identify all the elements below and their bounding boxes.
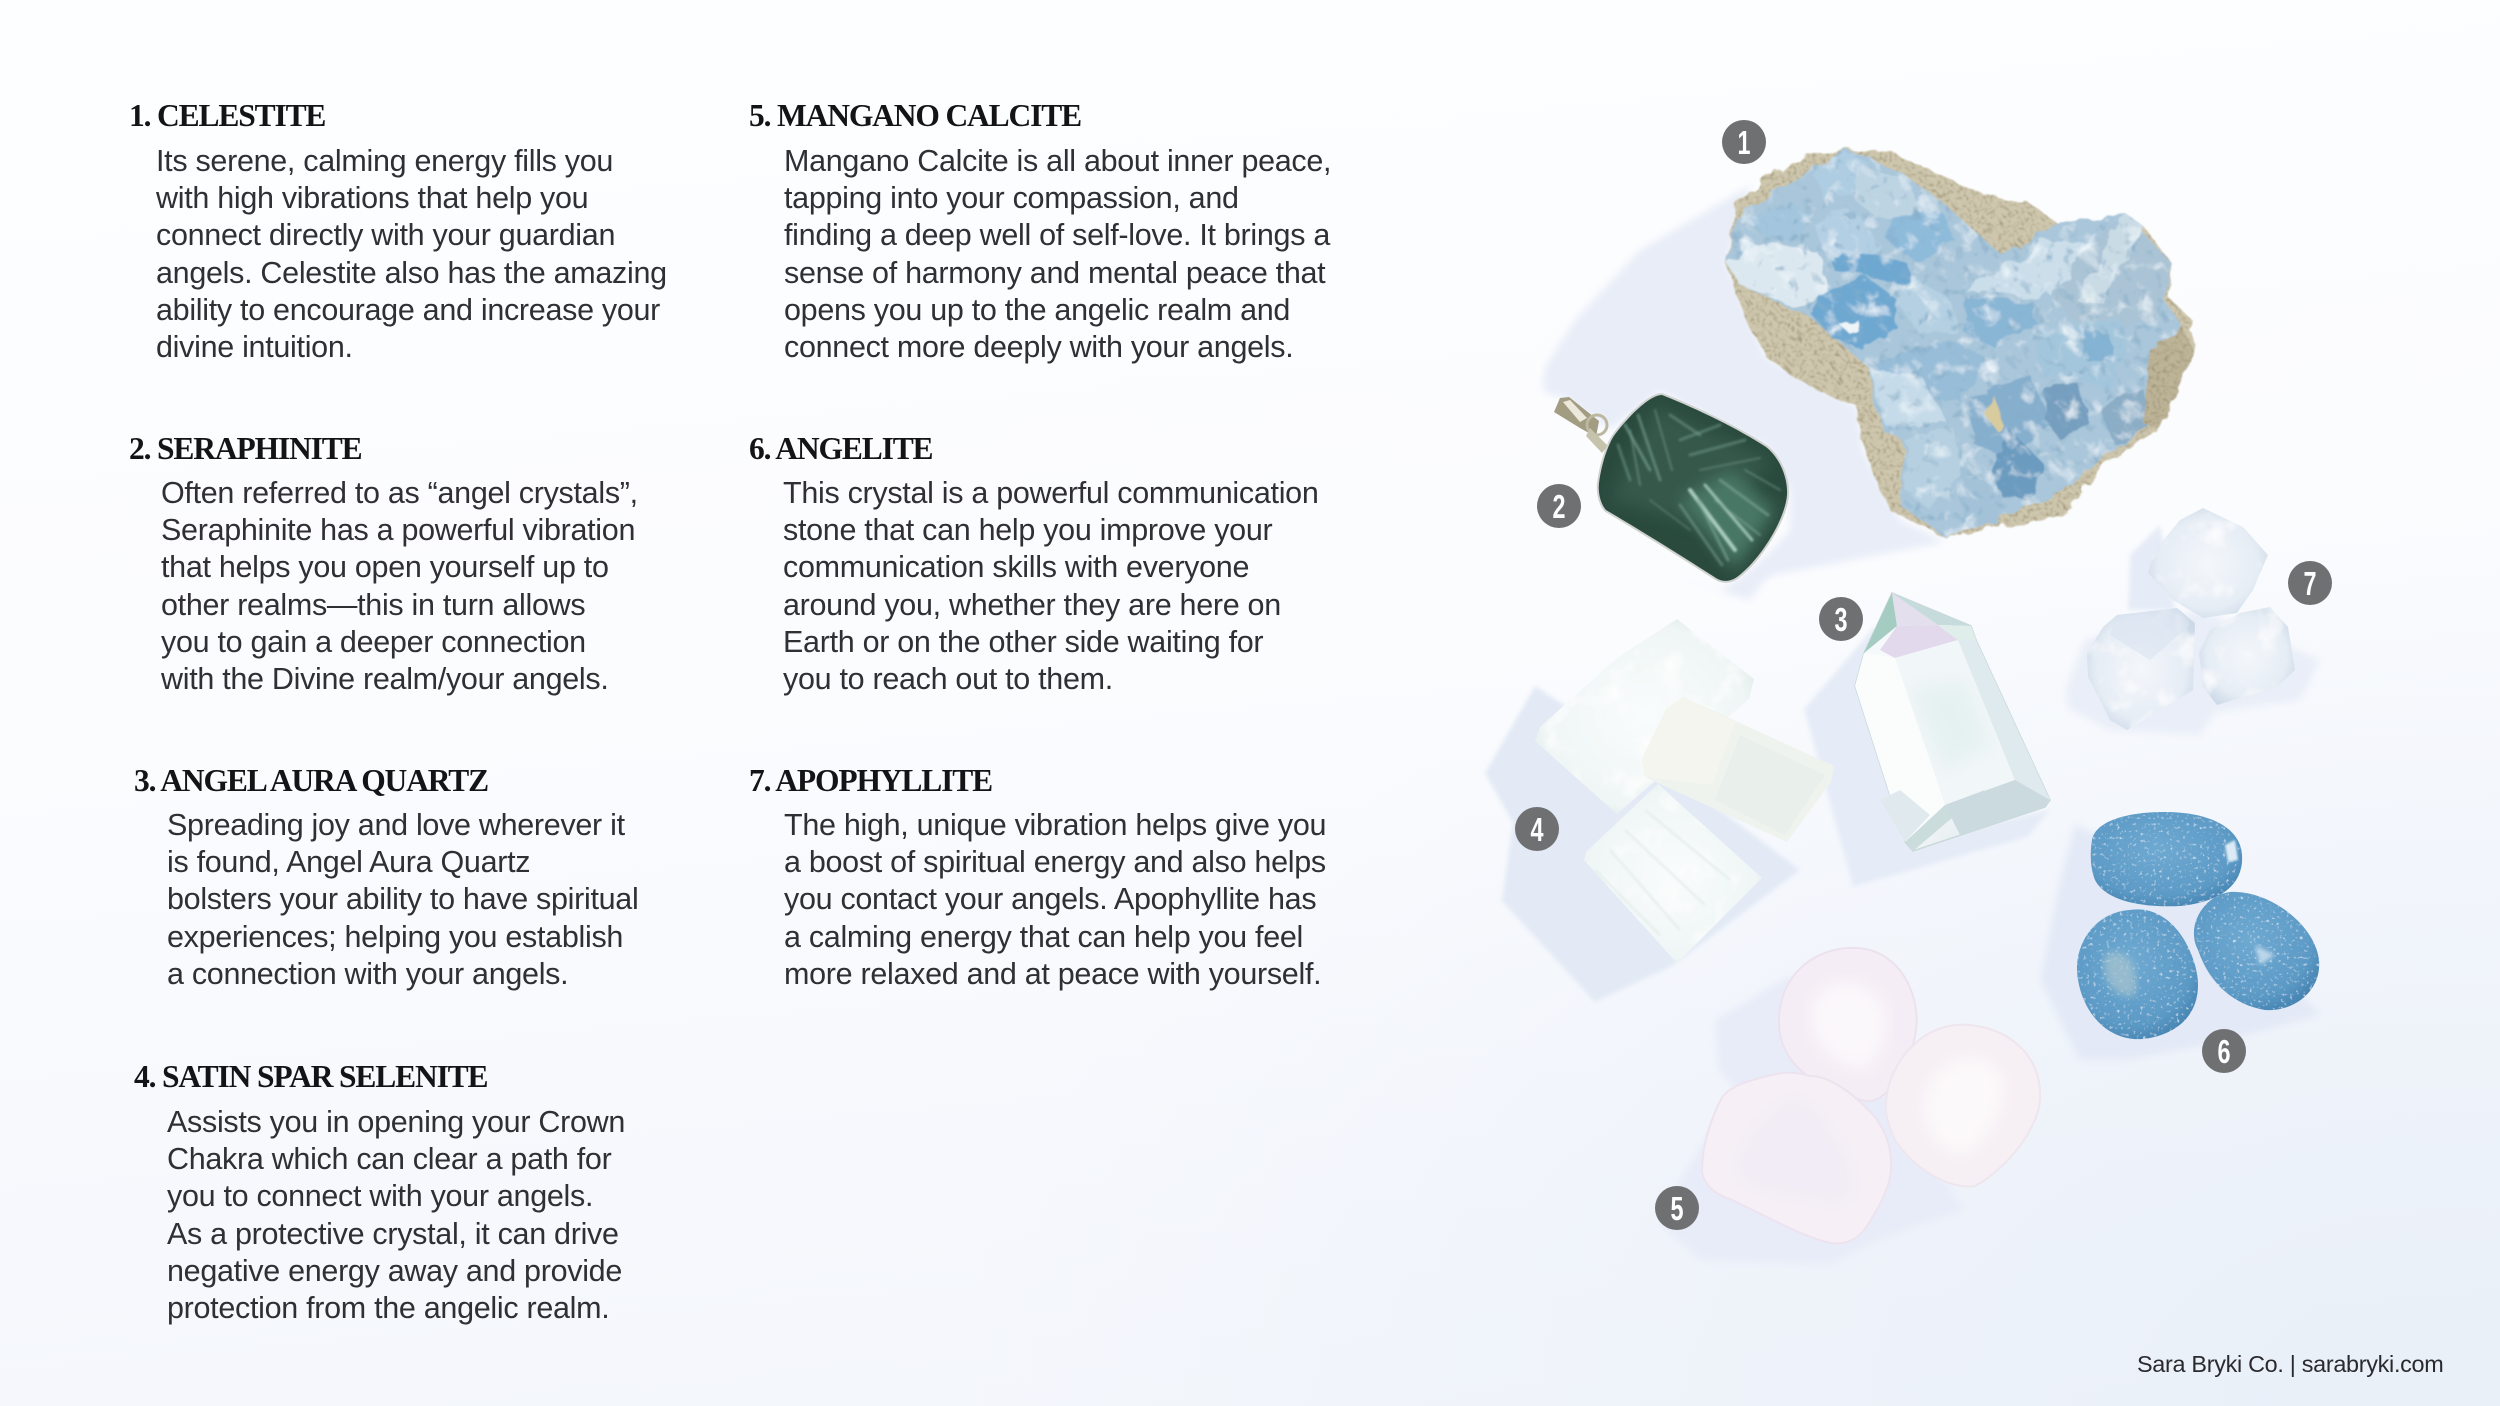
description: divine intuition. [156,330,353,364]
heading: 7. APOPHYLLITE [749,763,992,798]
text block: 4 Satin Spar Selenite [134,1059,625,1325]
description: negative energy away and provide [167,1254,622,1288]
description: you to reach out to them. [783,662,1113,696]
crystal 1: celestite cluster [1727,147,2192,537]
number badge 6 [2202,1029,2246,1073]
description: stone that can help you improve your [783,513,1272,547]
description: angels. Celestite also has the amazing [156,256,667,290]
number badge 2 [1537,484,1581,528]
crystal 6: angelite tumbled stones [2077,812,2319,1039]
description: Mangano Calcite is all about inner peace, [784,144,1331,178]
number badge 7: 7 [2304,565,2316,602]
heading: 1. CELESTITE [129,98,325,133]
description: Earth or on the other side waiting for [783,625,1263,659]
description: communication skills with everyone [783,550,1249,584]
number badge 3 [1819,597,1863,641]
crystal 4: satin spar selenite [1535,619,1834,963]
number badge 6: 6 [2218,1033,2230,1070]
heading: 5. MANGANO CALCITE [749,98,1081,133]
stone streaks [1598,395,1788,581]
text block: 2 Seraphinite [129,431,638,696]
crystal 7: apophyllite [2087,508,2295,730]
bail [1554,397,1599,437]
text block: 6 Angelite [749,431,1318,696]
description [783,476,1318,696]
number badge 7 [2288,561,2332,605]
description: This crystal is a powerful communication [783,476,1318,510]
heading: 6. ANGELITE [749,431,932,466]
text block: 5 Mangano Calcite [749,98,1331,364]
crystal photo area [1486,120,2332,1256]
description: is found, Angel Aura Quartz [167,845,530,879]
text block: 7 Apophyllite [749,763,1326,991]
description: connect more deeply with your angels. [784,330,1293,364]
rock matrix [1727,147,2192,537]
right stone [1886,1025,2040,1187]
description: ability to encourage and increase your [156,293,660,327]
description: with the Divine realm/your angels. [161,662,609,696]
heading: 2. SERAPHINITE [129,431,361,466]
text block: 1 Celestite [129,98,667,364]
description: opens you up to the angelic realm and [784,293,1290,327]
crystal 2: seraphinite pendant [1554,390,1800,590]
middle piece [1642,697,1834,842]
heading: 3. ANGEL AURA QUARTZ [134,763,488,798]
number badge 5: 5 [1670,1190,1684,1227]
description: Assists you in opening your Crown [167,1105,625,1139]
description: experiences; helping you establish [167,920,623,954]
description: Its serene, calming energy fills you [156,144,613,178]
description: more relaxed and at peace with yourself. [784,957,1321,991]
description [784,144,1331,364]
footer credit: Sara Bryki Co. | sarabryki.com [2137,1351,2443,1377]
description: you contact your angels. Apophyllite has [784,882,1316,916]
description [167,808,638,991]
text block: 3 Angel Aura Quartz [134,763,638,991]
description: that helps you open yourself up to [161,550,609,584]
description: a boost of spiritual energy and also helps [784,845,1326,879]
description: other realms—this in turn allows [161,588,585,622]
number badge 5 [1655,1186,1699,1230]
number badge 4: 4 [1530,811,1544,848]
cast shadows [1485,185,2320,1265]
description [167,1105,625,1325]
description [161,476,638,696]
description: with high vibrations that help you [156,181,588,215]
number badge 3: 3 [1834,601,1848,638]
description [156,144,667,364]
number badge 2: 2 [1552,488,1566,525]
description: As a protective crystal, it can drive [167,1217,619,1251]
description: sense of harmony and mental peace that [784,256,1325,290]
description: you to connect with your angels. [167,1179,593,1213]
description: Seraphinite has a powerful vibration [161,513,635,547]
number badge 1 [1722,120,1766,164]
number badge 1: 1 [1738,124,1750,161]
back piece [1535,619,1754,814]
bottom stone [1702,1073,1891,1243]
description: Chakra which can clear a path for [167,1142,611,1176]
description: connect directly with your guardian [156,218,615,252]
description: Often referred to as “angel crystals”, [161,476,638,510]
right piece [2199,607,2295,705]
description: a connection with your angels. [167,957,568,991]
crystal 5: mangano calcite tumbled stones [1702,948,2040,1243]
bottom piece [1584,784,1762,963]
description: Spreading joy and love wherever it [167,808,625,842]
crystal 3: angel aura quartz [1855,593,2050,851]
description: around you, whether they are here on [783,588,1281,622]
description: The high, unique vibration helps give you [784,808,1326,842]
number badge 4 [1515,807,1559,851]
top stone [1779,948,1917,1101]
description: finding a deep well of self-love. It brings a [784,218,1330,252]
description [784,808,1326,991]
heading: 4. SATIN SPAR SELENITE [134,1059,487,1094]
description: tapping into your compassion, and [784,181,1239,215]
description: a calming energy that can help you feel [784,920,1303,954]
description: protection from the angelic realm. [167,1291,609,1325]
blue crystal mass [1727,147,2183,537]
description: you to gain a deeper connection [161,625,586,659]
top piece [2148,508,2268,618]
silver frame [1599,395,1787,581]
description: bolsters your ability to have spiritual [167,882,638,916]
left piece [2087,608,2195,730]
